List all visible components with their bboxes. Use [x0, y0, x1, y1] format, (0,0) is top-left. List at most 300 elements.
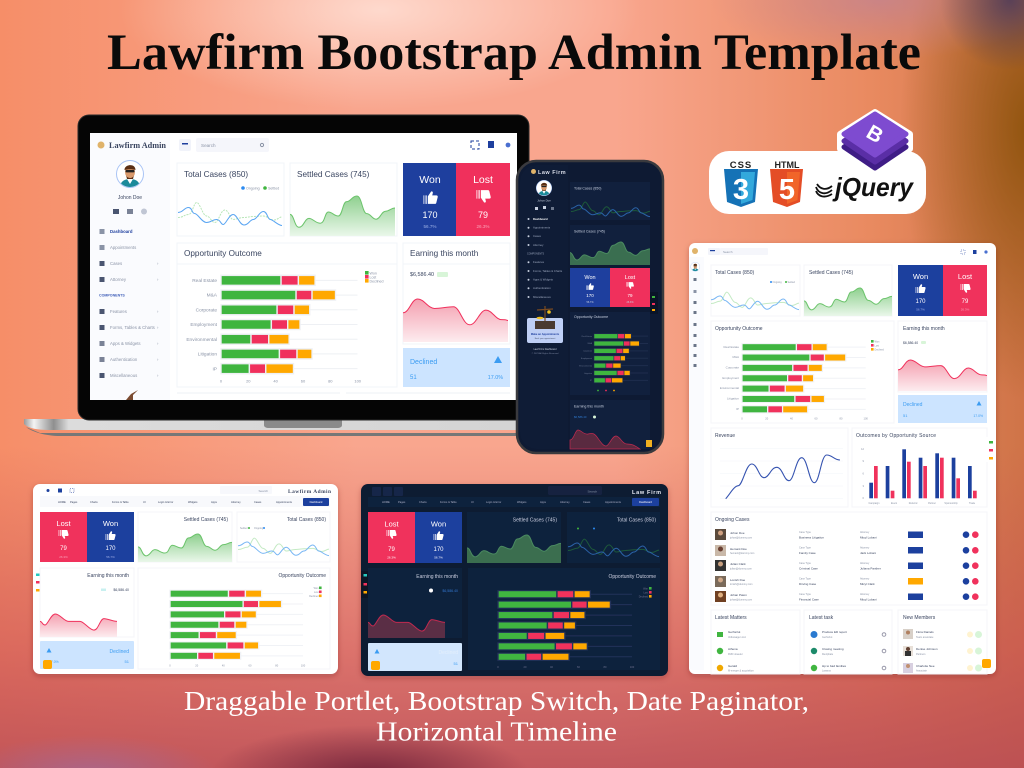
- card: opportunity outcome: Won: [874, 340, 880, 344]
- nav bar: Appointments: [605, 500, 622, 504]
- card: opportunity outcome: 80: [604, 665, 607, 669]
- phone sidebar: Law Firm: [538, 170, 566, 176]
- card: latest matters: M-merger & acquisition: [728, 670, 754, 672]
- won card: 170: [915, 299, 926, 305]
- card: opportunity outcome: Declined: [874, 348, 884, 352]
- card: outcomes by opportunity source bar chart: [852, 428, 987, 507]
- CSS3 logo: [724, 160, 758, 207]
- card: total cases: Settled: [268, 186, 279, 190]
- bottom-middle dark RTL dashboard screenshot: [361, 484, 668, 676]
- nav bar: HOME: [382, 500, 390, 504]
- won card: Won: [913, 272, 928, 281]
- card: ongoing cases table: Criminal Case: [799, 566, 818, 570]
- bottom-left RTL dashboard screenshot: [33, 484, 338, 674]
- phone sidebar: © 2023 All Rights Reserved: [532, 352, 559, 355]
- header: [372, 486, 661, 496]
- card: latest task: Gerhsrlut: [822, 636, 833, 639]
- nav bar: Login & Error: [158, 500, 173, 504]
- card: settled cases: [467, 512, 561, 563]
- lost card: 26.3%: [476, 224, 490, 229]
- nav bar: Appointments: [276, 500, 293, 504]
- nav bar: UI: [143, 500, 146, 504]
- card: ongoing cases table: Business Litigation: [799, 536, 824, 540]
- lost card: Lost: [473, 174, 493, 186]
- sidebar: ›: [157, 277, 159, 282]
- card: earning this month: [368, 568, 462, 638]
- card: opportunity outcome: 60: [577, 665, 580, 669]
- card: latest matters: Gerhsrlut: [728, 630, 741, 634]
- card: earning this month: $6,586.40: [113, 588, 129, 592]
- sidebar: COMPONENTS: [99, 294, 125, 298]
- card: outcomes by opportunity source bar chart: 0: [863, 496, 865, 500]
- card: declined: 51: [125, 659, 130, 664]
- right dashboard screenshot: [689, 243, 996, 674]
- card: opportunity outcome: Opportunity Outcome: [278, 573, 326, 579]
- lost card: [368, 512, 415, 563]
- card: earning this month: $6,586.40: [442, 589, 458, 593]
- card: outcomes by opportunity source bar chart: Event: [891, 502, 897, 505]
- card: latest task: Hp to bad families: [822, 664, 847, 668]
- phone lost card: [610, 268, 650, 307]
- phone mockup: [517, 161, 663, 453]
- card: declined: Declined: [410, 359, 437, 366]
- card: opportunity outcome: 20: [195, 664, 199, 668]
- phone card: total cases: Total Cases (850): [574, 186, 601, 190]
- subtitle: [184, 686, 809, 746]
- nav bar: Widgets: [517, 500, 527, 504]
- card: opportunity outcome: Real Estate: [723, 345, 739, 349]
- phone card: settled cases: [570, 225, 650, 265]
- card: new members: Team associate: [916, 636, 934, 639]
- card: opportunity outcome: 100: [630, 665, 635, 669]
- card: ongoing cases table: Attorney: [860, 562, 870, 565]
- sidebar: Apps & Widgets: [110, 341, 141, 346]
- lost card: 26.3%: [387, 556, 396, 560]
- card: earning this month: Earning this month: [410, 249, 479, 258]
- phone sidebar: Apps & Widgets: [533, 278, 553, 282]
- phone sidebar: Appointments: [533, 226, 551, 230]
- sidebar: Miscellaneous: [110, 373, 137, 378]
- won card: 170: [422, 210, 438, 220]
- nav bar: Forms & Table: [440, 500, 457, 504]
- phone card: opportunity outcome: Employment: [581, 357, 592, 360]
- card: settled cases: [290, 163, 397, 236]
- card: ongoing cases table: Case Type: [799, 593, 812, 596]
- won card: Won: [431, 520, 446, 528]
- won card: 170: [105, 546, 116, 552]
- sidebar: Dashboard: [110, 229, 133, 234]
- nav bar: Apps: [540, 500, 547, 504]
- sidebar: ›: [157, 373, 159, 378]
- phone sidebar: Forms, Tables & Charts: [533, 269, 563, 273]
- sidebar: ›: [157, 325, 159, 330]
- nav bar: Pages: [70, 500, 78, 504]
- card: ongoing cases table: Case Type: [799, 546, 812, 550]
- card: opportunity outcome: 80: [328, 378, 333, 384]
- lost card: Lost: [56, 519, 71, 528]
- phone card: earning this month: [570, 400, 652, 449]
- won card: [403, 163, 456, 236]
- lost card: [943, 265, 987, 316]
- nav bar: Attorney: [231, 500, 241, 504]
- card: ongoing cases table: [711, 512, 987, 605]
- won card: [87, 512, 134, 562]
- won card: 56.7%: [423, 224, 437, 229]
- floating orange button: [43, 660, 52, 669]
- card: outcomes by opportunity source bar chart: 3: [863, 484, 865, 488]
- card: outcomes by opportunity source bar chart: Referral: [909, 502, 918, 505]
- phone card: opportunity outcome: IP: [590, 380, 593, 382]
- phone won card: 170: [586, 293, 594, 298]
- card: opportunity outcome: M&A: [732, 355, 739, 359]
- card: settled cases: Settled Cases (745): [297, 170, 370, 179]
- card: total cases: Ongoing: [254, 527, 264, 530]
- phone sidebar: Lawf Firm Dashboard: [534, 348, 557, 351]
- sidebar: [90, 133, 170, 400]
- card: opportunity outcome: Environmental: [186, 337, 217, 343]
- card: declined: 17.0%: [49, 660, 59, 664]
- phone card: total cases: [570, 182, 650, 220]
- lost card: 79: [388, 547, 395, 553]
- phone lost card: 79: [627, 293, 633, 298]
- phone won card: 56.7%: [586, 301, 594, 304]
- lost card: 79: [962, 299, 969, 305]
- lost card: 26.3%: [59, 555, 68, 559]
- card: opportunity outcome: 0: [220, 378, 223, 384]
- won card: 56.7%: [916, 308, 925, 312]
- card: declined: Declined: [903, 402, 923, 408]
- card: ongoing cases table: Attorney: [860, 578, 870, 580]
- header: Law Firm: [632, 490, 661, 496]
- card: ongoing cases table: Johon Doe: [730, 531, 745, 535]
- card: declined: Declined: [439, 650, 458, 656]
- nav bar: [40, 496, 330, 507]
- card: latest matters: Volkswagen Ltd.: [728, 636, 747, 639]
- card: outcomes by opportunity source bar chart: 9: [863, 459, 865, 463]
- card: revenue line chart: [711, 428, 848, 507]
- card: total cases: [177, 163, 284, 236]
- card: opportunity outcome: Won: [314, 587, 319, 590]
- floating orange button: [371, 661, 380, 670]
- card: new members: Associate: [916, 670, 927, 672]
- phone sidebar: Dashboard: [533, 217, 548, 221]
- card: ongoing cases table: Family Case: [799, 551, 816, 555]
- card: declined: 17.0%: [488, 375, 503, 381]
- card: new members: Flora Daniels: [916, 630, 934, 634]
- phone sidebar: Cases: [533, 234, 542, 238]
- card: opportunity outcome: 20: [524, 665, 527, 669]
- floating settings strip: [985, 437, 996, 462]
- card: declined: 51: [410, 375, 417, 381]
- card: opportunity outcome: 0: [497, 665, 499, 669]
- nav bar: Dashboard: [310, 500, 323, 504]
- card: earning this month: [403, 243, 510, 344]
- CSS3 logo: 3: [733, 174, 749, 206]
- card: ongoing cases table: Johan Paton: [730, 593, 747, 597]
- card: opportunity outcome: 20: [765, 416, 769, 420]
- subtitle: Draggable Portlet, Bootstrap Switch, Date Paginator,: [184, 686, 809, 716]
- card: earning this month: $6,586.40: [410, 272, 434, 278]
- phone sidebar: [520, 165, 568, 449]
- won card: 56.7%: [434, 556, 443, 560]
- card: latest task: Lazarus: [822, 670, 832, 672]
- nav bar: Attorney: [560, 500, 570, 504]
- won card: 56.7%: [106, 555, 115, 559]
- phone sidebar: COMPONENTS: [527, 252, 545, 256]
- lost card: Lost: [384, 520, 399, 528]
- card: opportunity outcome: 60: [301, 378, 306, 384]
- card: new members: Denise Johnson: [916, 647, 938, 651]
- card: total cases: Total Cases (850): [617, 518, 656, 524]
- card: settled cases: [138, 512, 232, 562]
- lost card: [456, 163, 510, 236]
- card: total cases: Ongoing: [246, 186, 260, 190]
- HTML5 logo: [770, 160, 803, 207]
- top bar: Search: [201, 143, 216, 148]
- card: opportunity outcome: 100: [301, 664, 306, 668]
- header: Search: [258, 489, 268, 493]
- card: outcomes by opportunity source bar chart: Trade: [969, 502, 976, 505]
- sidebar: ›: [157, 357, 159, 362]
- phone won card: [570, 268, 610, 307]
- card: ongoing cases table: Driving Case: [799, 582, 817, 586]
- card: opportunity outcome: 80: [840, 416, 843, 420]
- sidebar: Attorney: [110, 277, 127, 282]
- laptop mockup: [24, 115, 529, 436]
- card: declined: Declined: [110, 649, 129, 655]
- card: opportunity outcome: 40: [550, 665, 553, 669]
- nav bar: HOME: [58, 500, 66, 504]
- card: opportunity outcome: M&A: [207, 292, 218, 298]
- nav bar: Login & Error: [486, 500, 501, 504]
- card: opportunity outcome: 40: [790, 416, 793, 420]
- phone card: earning this month: Earning this month: [574, 404, 604, 408]
- header: Search: [587, 490, 597, 494]
- appointment card: [527, 306, 563, 343]
- card: declined: 51: [454, 661, 459, 666]
- card: latest task: Rexiphale: [822, 653, 834, 656]
- sidebar: Forms, Tables & Charts: [110, 325, 155, 330]
- nav bar: [368, 497, 660, 507]
- card: ongoing cases table: Ongoing Cases: [715, 517, 750, 523]
- card: new members: New Members: [903, 615, 936, 621]
- phone sidebar: Attorney: [533, 243, 544, 247]
- card: outcomes by opportunity source bar chart: Sponsorship: [944, 502, 958, 505]
- card: opportunity outcome: 0: [741, 416, 743, 420]
- won card: [898, 265, 943, 316]
- phone won card: Won: [584, 275, 596, 281]
- card: ongoing cases table: Jack Lobani: [860, 551, 876, 555]
- lost card: 79: [478, 210, 488, 220]
- card: ongoing cases table: Hemant Doe: [730, 547, 747, 551]
- nav bar: UI: [471, 500, 474, 504]
- card: latest matters: FMD Jeweler: [728, 653, 743, 656]
- lost card: Lost: [958, 272, 973, 281]
- sidebar: Lawfirm Admin: [109, 140, 166, 150]
- card: opportunity outcome: Opportunity Outcome: [184, 249, 262, 258]
- card: opportunity outcome: Corporate: [726, 366, 739, 370]
- card: new members: [898, 610, 987, 674]
- card: declined: [368, 643, 462, 671]
- card: opportunity outcome: Employment: [722, 376, 739, 380]
- phone sidebar: Features: [533, 260, 545, 264]
- card: ongoing cases table: julian@dummy.com: [729, 568, 752, 570]
- card: ongoing cases table: Attorney: [860, 531, 870, 534]
- card: earning this month: Earning this month: [416, 574, 458, 580]
- nav bar: Cases: [254, 500, 262, 504]
- card: settled cases: Settled Cases (745): [184, 517, 228, 523]
- phone card: settled cases: Settled Cases (745): [574, 230, 605, 234]
- card: ongoing cases table: johan@dummy.com: [729, 598, 752, 602]
- card: opportunity outcome: Lost: [314, 591, 319, 594]
- laptop screen: [90, 133, 517, 400]
- card: opportunity outcome: Environmental: [720, 386, 739, 390]
- sidebar: Authentication: [110, 357, 138, 362]
- card: opportunity outcome: 100: [354, 378, 362, 384]
- card: opportunity outcome: [711, 321, 894, 423]
- card: opportunity outcome: IP: [212, 366, 217, 372]
- card: outcomes by opportunity source bar chart: 6: [863, 472, 865, 476]
- card: earning this month: Earning this month: [903, 326, 945, 332]
- laptop bezel: [78, 115, 529, 420]
- card: total cases: Total Cases (850): [287, 517, 326, 523]
- card: settled cases: Settled Cases (745): [809, 270, 854, 276]
- card: total cases: Total Cases (850): [715, 270, 755, 276]
- top bar: Search: [723, 250, 733, 254]
- card: opportunity outcome: 40: [222, 664, 225, 668]
- card: opportunity outcome: [177, 243, 397, 387]
- card: opportunity outcome: Won: [643, 588, 649, 590]
- card: opportunity outcome: Lost: [874, 344, 879, 348]
- card: opportunity outcome: IP: [736, 407, 739, 411]
- won card: Won: [419, 174, 441, 186]
- card: opportunity outcome: Litigation: [727, 396, 739, 400]
- card: latest matters: Athena: [728, 647, 738, 651]
- HTML5 logo: 5: [779, 174, 795, 206]
- card: total cases: Total Cases (850): [184, 170, 248, 179]
- collapsed sidebar: [689, 248, 704, 670]
- card: ongoing cases table: Julian Clark: [730, 562, 746, 566]
- card: ongoing cases table: hemant@dummy.com: [730, 552, 754, 555]
- card: opportunity outcome: Opportunity Outcome: [608, 574, 656, 580]
- floating orange button: [982, 659, 991, 668]
- card: new members: Charlotte Nee: [916, 664, 935, 668]
- nav bar: Apps: [211, 500, 218, 504]
- sidebar: Johon Doe: [118, 195, 142, 201]
- card: outcomes by opportunity source bar chart: 12: [861, 447, 865, 451]
- Bootstrap logo: [840, 112, 910, 171]
- card: outcomes by opportunity source bar chart: Partner: [928, 502, 936, 505]
- card: ongoing cases table: lonish@dummy.com: [730, 583, 752, 586]
- card: latest task: [804, 610, 892, 674]
- card: opportunity outcome: Litigation: [198, 352, 217, 358]
- phone sidebar: Miscellaneous: [533, 295, 551, 299]
- card: ongoing cases table: Attorney: [860, 546, 870, 550]
- card: earning this month: Earning this month: [87, 573, 129, 579]
- sidebar: Appointments: [110, 245, 136, 250]
- card: opportunity outcome: Won: [370, 272, 377, 276]
- card: ongoing cases table: Lonish Doe: [730, 578, 746, 582]
- card: total cases: Settled: [788, 281, 796, 284]
- won card: [415, 512, 462, 563]
- card: opportunity outcome: Real Estate: [192, 278, 217, 284]
- CSS3 logo: CSS: [730, 160, 752, 171]
- card: opportunity outcome: 100: [864, 416, 868, 420]
- jQuery logo: jQuery: [832, 172, 914, 202]
- card: opportunity outcome: 60: [815, 416, 818, 420]
- phone card: opportunity outcome: Litigation: [584, 372, 592, 375]
- sidebar: ›: [157, 309, 159, 314]
- card: declined: [403, 348, 510, 387]
- nav bar: Dashboard: [639, 500, 652, 504]
- laptop base: [24, 419, 520, 436]
- phone card: opportunity outcome: Environmental: [579, 364, 593, 368]
- card: opportunity outcome: 60: [249, 664, 252, 668]
- card: earning this month: [40, 568, 134, 637]
- card: opportunity outcome: [468, 568, 660, 670]
- card: opportunity outcome: Declined: [370, 280, 383, 284]
- card: opportunity outcome: Opportunity Outcome: [715, 326, 763, 332]
- card: ongoing cases table: johon@dummy.com: [729, 536, 752, 540]
- card: ongoing cases table: Micyl Lobani: [860, 598, 877, 602]
- nav bar: Widgets: [188, 500, 198, 504]
- card: ongoing cases table: Micyl Lobani: [860, 536, 877, 540]
- card: total cases: [567, 512, 660, 563]
- card: opportunity outcome: Corporate: [196, 308, 217, 314]
- card: opportunity outcome: [138, 568, 330, 669]
- card: total cases: [711, 265, 800, 316]
- card: latest task: Latest task: [809, 615, 834, 621]
- sidebar: Cases: [110, 261, 122, 266]
- card: ongoing cases table: Case Type: [799, 562, 812, 565]
- phone card: opportunity outcome: Real Estate: [582, 335, 593, 338]
- nav bar: Forms & Table: [112, 500, 129, 504]
- phone card: opportunity outcome: M&A: [588, 342, 593, 345]
- phone card: opportunity outcome: Opportunity Outcome: [574, 315, 608, 319]
- lost card: 26.3%: [961, 308, 970, 312]
- card: opportunity outcome: 0: [169, 664, 171, 668]
- card: declined: [40, 641, 134, 669]
- card: opportunity outcome: 20: [246, 378, 251, 384]
- top bar: [179, 138, 510, 152]
- card: outcomes by opportunity source bar chart: Campaign: [869, 502, 880, 505]
- lost card: 79: [60, 546, 67, 552]
- card: ongoing cases table: Juliana Panther: [860, 566, 881, 570]
- card: declined: 17.0%: [973, 414, 983, 418]
- header: [46, 486, 331, 495]
- card: ongoing cases table: Attorney: [860, 593, 870, 596]
- card: ongoing cases table: Case Type: [799, 578, 812, 580]
- Bootstrap logo: B: [862, 121, 887, 148]
- phone sidebar: Johon Doe: [537, 198, 551, 202]
- card: settled cases: Settled Cases (745): [513, 518, 557, 524]
- card: latest matters: Gerald: [728, 664, 737, 668]
- top-right technology badges: [709, 112, 926, 214]
- appointment card: Book your appointment: [535, 337, 556, 340]
- top bar: [708, 248, 988, 255]
- nav bar: Charts: [90, 500, 98, 504]
- header: Lawfirm Admin: [288, 489, 331, 495]
- side strip: [33, 570, 43, 597]
- subtitle: Horizontal Timeline: [376, 716, 617, 746]
- card: opportunity outcome: Lost: [370, 276, 376, 280]
- card: opportunity outcome: 80: [275, 664, 279, 668]
- card: declined: [898, 395, 987, 423]
- nav bar: Cases: [583, 500, 591, 504]
- title: Lawfirm Bootstrap Admin Template: [107, 25, 921, 81]
- phone sidebar: Authentication: [533, 286, 551, 290]
- card: ongoing cases table: Financial Case: [799, 598, 819, 602]
